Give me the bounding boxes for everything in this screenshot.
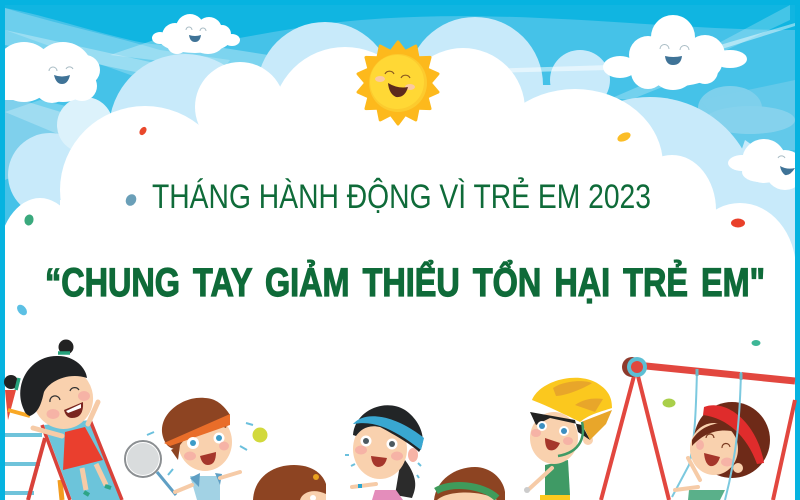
- left cloud with face: [0, 42, 100, 103]
- boy with yellow helmet: [524, 378, 612, 500]
- running girl with blue headband: [345, 405, 424, 500]
- pale background clouds: [8, 17, 795, 313]
- racket boy: [125, 398, 268, 500]
- title: THÁNG HÀNH ĐỘNG VÌ TRẺ EM 2023: [152, 178, 651, 216]
- girl on slide: [4, 340, 111, 495]
- slide and ladder: [5, 390, 122, 500]
- child on swing: [672, 369, 770, 500]
- brown haired child: [253, 465, 326, 500]
- top cloud with face: [152, 14, 240, 54]
- right cloud with face: [603, 15, 747, 90]
- swing frame: [601, 357, 795, 500]
- confetti leaves: [15, 126, 760, 408]
- far right cloud with face: [728, 139, 800, 190]
- boy with green headband: [434, 467, 505, 500]
- sun: [356, 42, 440, 124]
